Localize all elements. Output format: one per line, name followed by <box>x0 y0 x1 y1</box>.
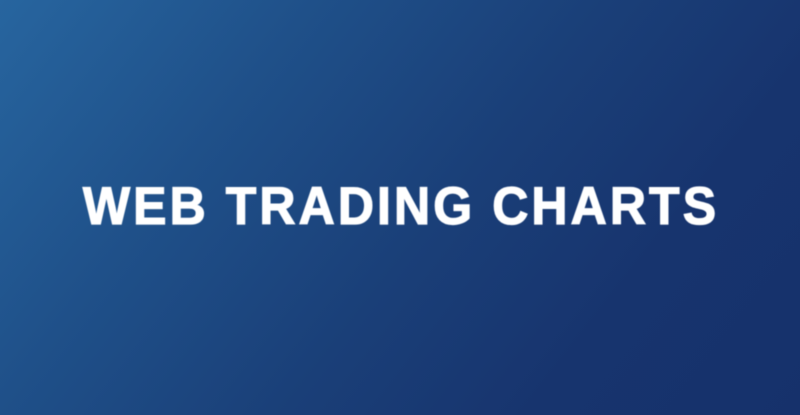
title: WEB TRADING CHARTS <box>83 176 719 236</box>
